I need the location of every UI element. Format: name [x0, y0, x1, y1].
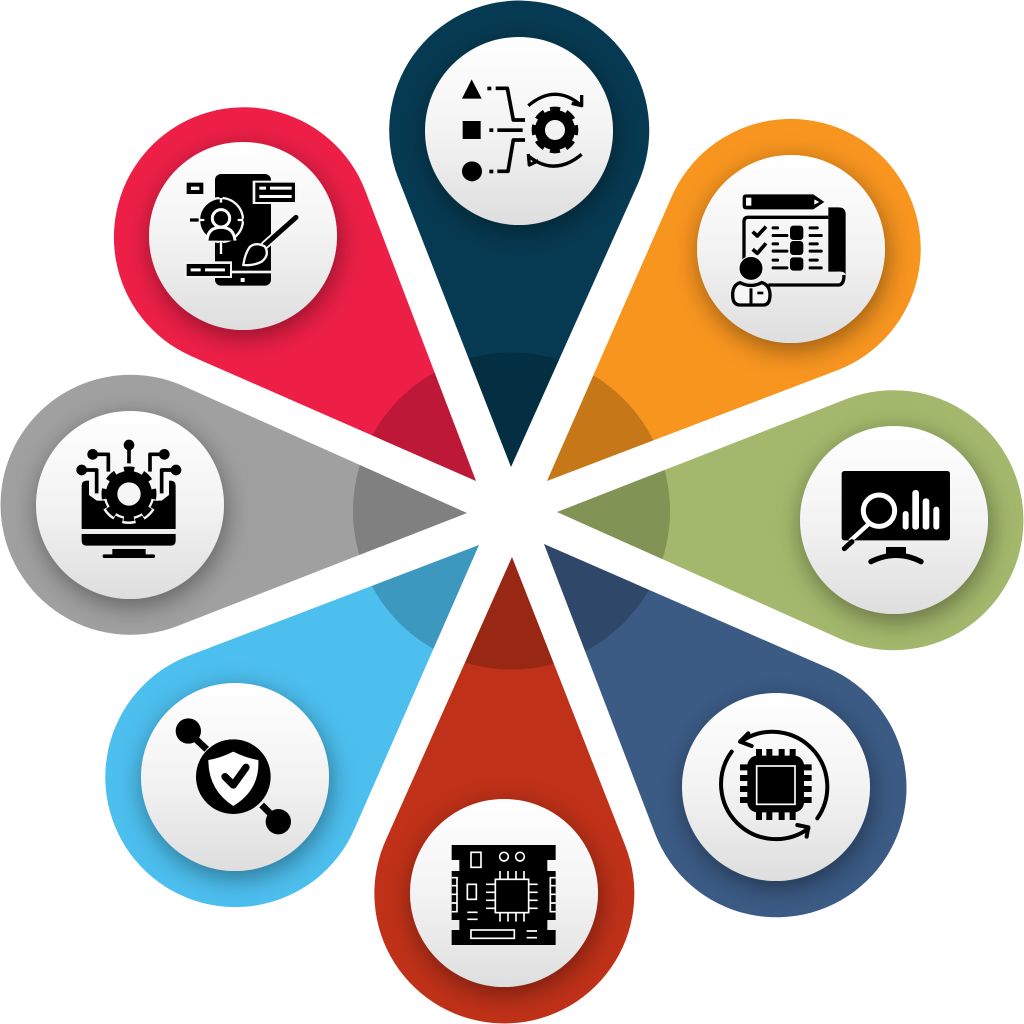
petal shape: light blue	[51, 451, 569, 961]
icon: circuit board	[452, 845, 556, 945]
panel: top dark teal petal	[389, 0, 650, 467]
petal shape: orange	[457, 65, 975, 575]
icon: computer with gear and nodes	[76, 440, 181, 558]
petal shape: crimson	[60, 53, 570, 571]
icon: processor with cycle arrows	[721, 732, 827, 839]
icon disc: navy petal	[682, 693, 870, 881]
petal shape: gray	[0, 372, 470, 643]
darkened inner core: brick red	[465, 557, 554, 670]
darkened inner core: gray	[353, 465, 467, 555]
icon disc: green petal	[800, 426, 988, 614]
petal shape: navy	[450, 454, 960, 971]
darkened inner core: crimson	[372, 372, 476, 481]
icon disc: orange petal	[697, 155, 885, 343]
icon disc: crimson petal	[149, 142, 337, 330]
darkened inner core: orange	[547, 376, 654, 481]
icon disc: brick red petal	[410, 799, 598, 987]
icon: checklist plan with person and pencil	[733, 194, 846, 305]
petal shape: brick red	[371, 554, 642, 1024]
petal shape: green	[554, 382, 1024, 653]
icon: shapes into gear process	[462, 79, 582, 181]
darkened inner core: light blue	[372, 545, 479, 649]
panel: brick red petal	[374, 557, 634, 1024]
icon: security shield with nodes	[176, 718, 291, 834]
icon disc: light blue petal	[141, 683, 329, 871]
icon: monitor with magnifier and bars	[842, 471, 950, 562]
icon: phone with target user and paintbrush	[185, 174, 297, 286]
panel: crimson petal	[114, 107, 476, 481]
petal shape: teal	[381, 0, 652, 470]
panel: gray petal	[0, 374, 467, 635]
darkened inner core: navy	[544, 544, 649, 652]
panel: navy blue petal	[544, 544, 906, 918]
darkened inner core: green	[557, 470, 670, 559]
panel: orange petal	[547, 118, 921, 481]
panel: green petal	[557, 390, 1024, 650]
icon disc: gray petal	[36, 411, 224, 599]
icon disc: teal petal	[425, 37, 613, 225]
panel: light blue petal	[105, 545, 479, 908]
darkened inner core: teal	[468, 352, 559, 467]
